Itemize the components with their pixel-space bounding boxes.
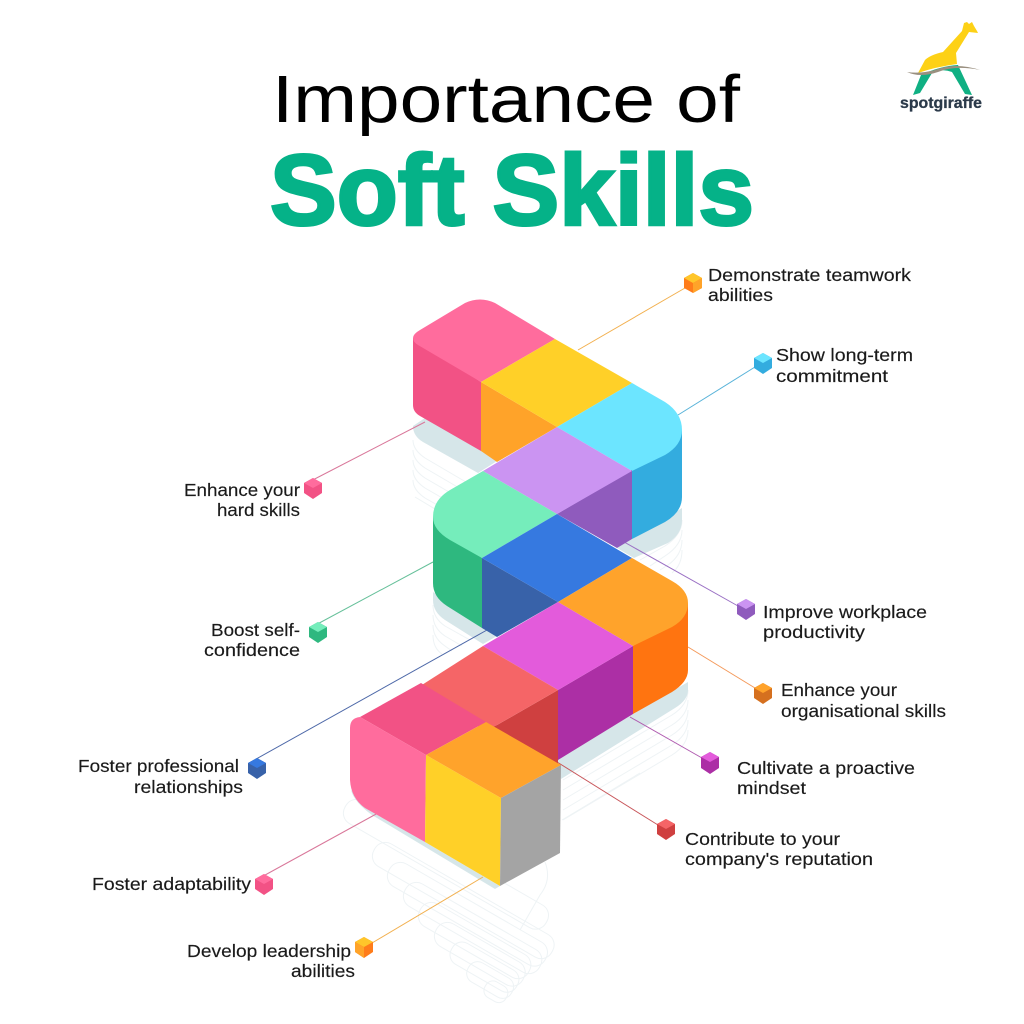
label: Improve workplace productivity xyxy=(737,599,927,642)
text: Demonstrate teamwork xyxy=(708,265,911,285)
icon: cube xyxy=(737,599,755,620)
red block xyxy=(414,646,558,766)
label: Foster professional relationships xyxy=(78,756,266,797)
text: commitment xyxy=(776,366,888,386)
icon: cube xyxy=(684,273,702,293)
label: Boost self-confidence xyxy=(204,620,327,660)
cyan block xyxy=(557,383,682,539)
icon: cube xyxy=(309,622,327,643)
purple block xyxy=(483,427,632,548)
text: Enhance your xyxy=(184,480,300,500)
tier 1 xyxy=(413,300,682,548)
label: Foster adaptability xyxy=(92,874,273,895)
yellow/orange block xyxy=(481,339,632,462)
icon: cube xyxy=(304,478,322,499)
solid shadows xyxy=(351,418,688,889)
label: Cultivate a proactive mindset xyxy=(701,752,915,798)
isometric block stack xyxy=(350,300,688,886)
orange block xyxy=(558,558,688,714)
text: productivity xyxy=(763,622,865,642)
text: hard skills xyxy=(217,500,300,520)
text: relationships xyxy=(134,777,243,797)
tier 3 xyxy=(350,646,561,886)
text: abilities xyxy=(291,961,355,981)
label: Demonstrate teamwork abilities xyxy=(684,265,911,305)
text: abilities xyxy=(708,285,773,305)
icon: cube xyxy=(355,937,373,958)
text: mindset xyxy=(737,778,806,798)
yellow cube xyxy=(425,722,561,886)
heading: Soft Skills: Soft Skills xyxy=(270,134,754,246)
text: Contribute to your xyxy=(685,829,840,849)
text: Foster adaptability xyxy=(92,874,251,894)
pink block xyxy=(350,683,486,842)
logo: spotgiraffe xyxy=(900,22,982,112)
icon: cube xyxy=(754,683,772,704)
text: confidence xyxy=(204,640,300,660)
text: organisational skills xyxy=(781,701,946,721)
icon: cube xyxy=(657,819,675,840)
text: Boost self- xyxy=(211,620,300,640)
magenta block xyxy=(483,602,633,760)
ghost shadows under the stack xyxy=(339,440,688,1006)
logo wordmark: spotgiraffe xyxy=(900,95,982,112)
icon: giraffe xyxy=(907,22,980,95)
text: Show long-term xyxy=(776,345,913,365)
label: Enhance your organisational skills xyxy=(754,680,946,721)
blue block xyxy=(482,514,632,637)
icon: cube xyxy=(754,353,772,374)
icon: cube xyxy=(701,752,719,774)
label: Contribute to your company's reputation xyxy=(657,819,873,869)
text: Foster professional xyxy=(78,756,239,776)
label: Enhance your hard skills xyxy=(184,478,322,520)
text: Enhance your xyxy=(781,680,897,700)
green block xyxy=(433,471,557,628)
text: company's reputation xyxy=(685,849,873,869)
heading: Importance of: Importance of xyxy=(272,62,740,137)
icon: cube xyxy=(255,874,273,895)
text: Improve workplace xyxy=(763,602,927,622)
text: Develop leadership xyxy=(187,941,351,961)
pink block xyxy=(413,300,555,451)
label: Develop leadership abilities xyxy=(187,937,373,981)
text: Cultivate a proactive xyxy=(737,758,915,778)
leader lines xyxy=(249,288,755,943)
icon: cube xyxy=(248,758,266,779)
title xyxy=(270,62,754,246)
label: Show long-term commitment xyxy=(754,345,913,386)
tier 2 xyxy=(433,471,688,760)
